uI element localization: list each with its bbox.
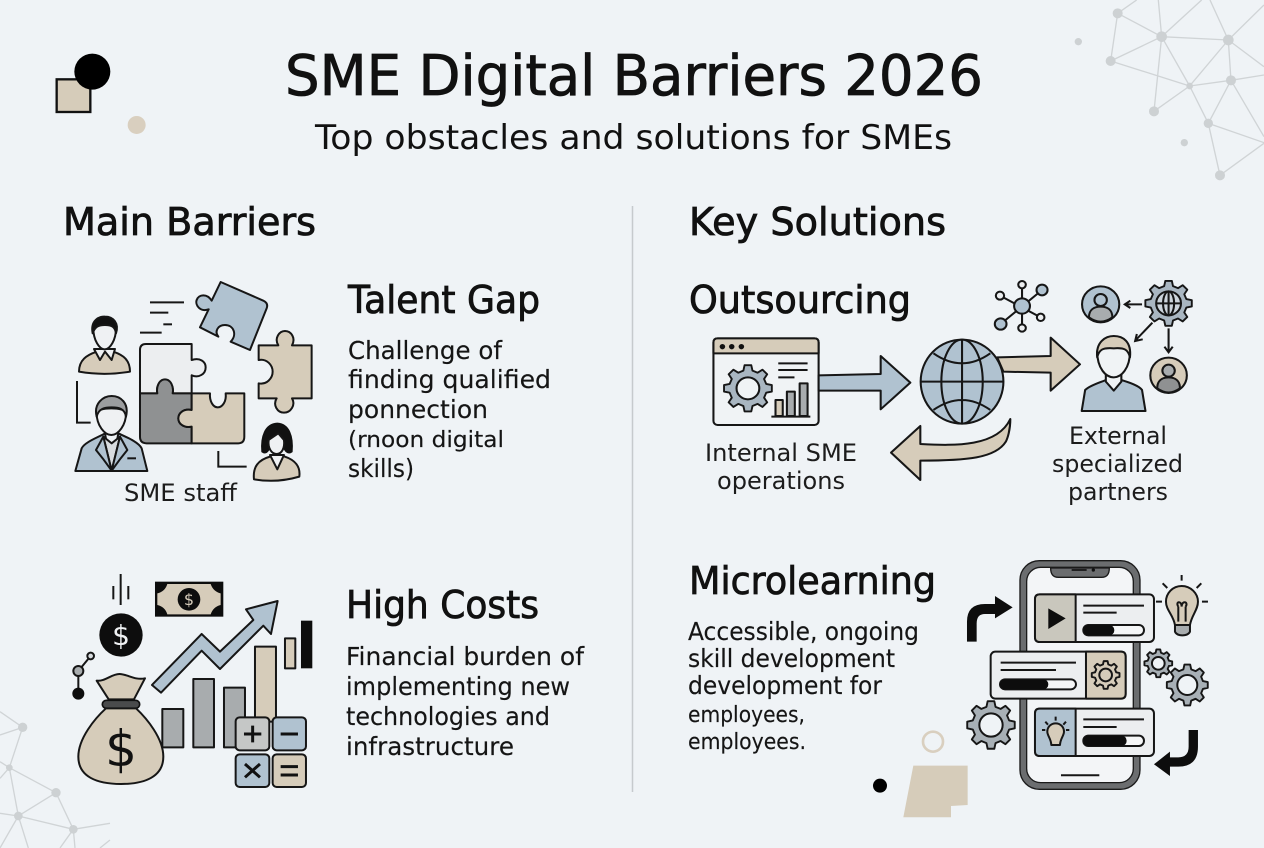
arrow: curved up right: [967, 596, 1013, 642]
arrow: curved down left: [1154, 730, 1198, 776]
heading: key solutions: Key Solutions: [689, 200, 946, 244]
icon: money bag, growth chart and calculator: $: [105, 720, 137, 778]
arrow: return to SME: [891, 419, 1010, 480]
text: microlearning description: development for: [688, 671, 883, 700]
text: talent gap description: [348, 336, 551, 483]
icon: money bag, growth chart and calculator: $: [184, 590, 194, 609]
label: internal SME operations: Internal SME: [705, 439, 857, 467]
icon: gear left: [967, 701, 1015, 749]
heading: talent gap: Talent Gap: [347, 278, 540, 322]
subtitle: Top obstacles and solutions for SMEs: [314, 118, 952, 158]
icon: light bulb: [1156, 575, 1208, 635]
icon: partner avatar blue: [1082, 286, 1119, 322]
column divider: [632, 206, 634, 792]
heading: main barriers: Main Barriers: [63, 200, 316, 244]
icon: network hub: [995, 281, 1048, 332]
arrow: to partners: [997, 338, 1080, 391]
arrow: to globe: [819, 356, 910, 409]
icon: partner avatar tan: [1150, 358, 1187, 393]
decorative logo shapes: square and circles: [57, 54, 146, 134]
text: high costs description: infrastructure: [346, 732, 514, 761]
panel: outsourcing: [689, 278, 1192, 506]
icon: globe: [921, 340, 1003, 424]
icon: staff and puzzle pieces: [75, 282, 312, 481]
decorative shapes: ring, dot and tan block: [873, 732, 968, 817]
panel: high costs: [72, 574, 585, 787]
heading: high costs: High Costs: [346, 583, 539, 627]
arrows: from gear to partners: [1125, 301, 1173, 352]
text: talent gap description: finding qualified: [348, 365, 551, 394]
icon: phone with lesson cards: [991, 561, 1154, 789]
text: talent gap description: skills): [348, 454, 414, 483]
icon: money bag, growth chart and calculator: $: [112, 619, 130, 652]
text: microlearning description: employees.: [688, 729, 806, 755]
text: talent gap description: Challenge of: [348, 336, 503, 365]
icon: gears cluster right: [1144, 649, 1208, 705]
icon: external partner: [1082, 336, 1145, 411]
label: external specialized partners: specialized: [1052, 450, 1183, 478]
panel: talent gap: [75, 278, 551, 507]
text: high costs description: [346, 642, 585, 761]
icon: internal operations window: [713, 338, 819, 425]
icon: globe gear: [1145, 281, 1192, 326]
label: internal SME operations: operations: [717, 467, 845, 495]
text: microlearning description: [688, 617, 919, 755]
network pattern: bottom left: [0, 712, 110, 848]
title: SME Digital Barriers 2026: [285, 44, 983, 109]
lesson card: video: [1035, 594, 1154, 642]
diagram: outsourcing flow: [713, 281, 1192, 480]
text: high costs description: Financial burden of: [346, 642, 585, 671]
label: external specialized partners: partners: [1068, 478, 1168, 506]
text: high costs description: technologies and: [346, 702, 550, 731]
text: high costs description: implementing new: [346, 672, 570, 701]
label: SME staff: SME staff: [124, 479, 237, 507]
label: external specialized partners: External: [1069, 422, 1167, 450]
heading: outsourcing: Outsourcing: [689, 278, 911, 322]
icon: money bag, growth chart and calculator: [72, 574, 312, 787]
text: microlearning description: skill development: [688, 644, 895, 673]
text: talent gap description: ponnection: [348, 395, 488, 424]
panel: microlearning: [688, 559, 1208, 817]
label: external specialized partners: [1052, 422, 1183, 506]
network pattern: top right: [1075, 0, 1264, 180]
text: microlearning description: Accessible, ongoing: [688, 617, 919, 646]
text: microlearning description: employees,: [688, 702, 805, 728]
heading: microlearning: Microlearning: [689, 559, 936, 603]
phone body: [1020, 561, 1140, 789]
label: internal SME operations: [705, 439, 857, 495]
text: talent gap description: (rnoon digital: [348, 427, 504, 453]
lesson card: settings: [991, 652, 1126, 699]
lesson card: idea: [1035, 709, 1154, 756]
